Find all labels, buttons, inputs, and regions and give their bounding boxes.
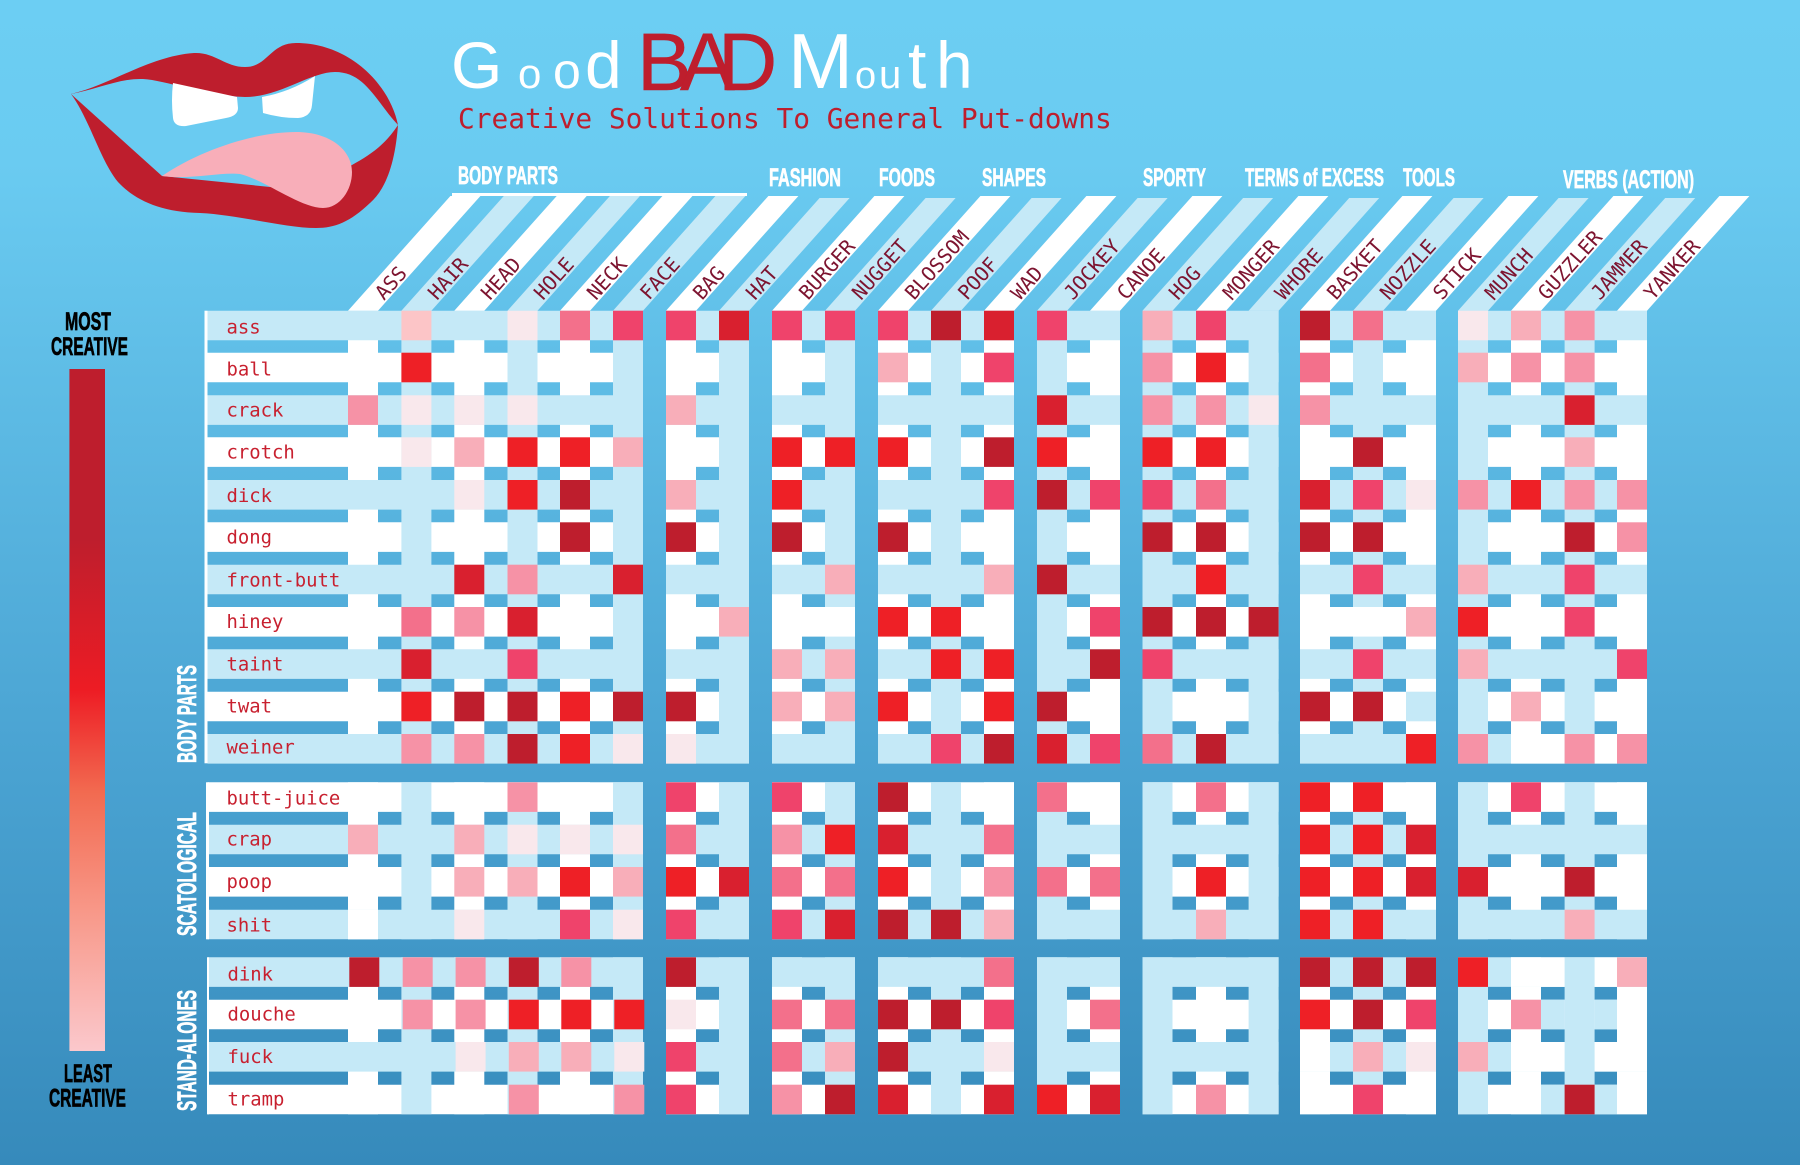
column labels: CANOE [1112, 243, 1170, 304]
header: tools: TOOLS [1403, 164, 1455, 192]
column labels: HOLE [529, 252, 579, 304]
title: o [553, 43, 581, 99]
row: douche [228, 1000, 1617, 1029]
column labels: ASS [370, 261, 412, 304]
row: crack: crack [226, 399, 284, 421]
header: sporty: SPORTY [1143, 164, 1206, 192]
row: crap [226, 825, 1436, 854]
title: M [788, 17, 853, 105]
row: weiner: weiner [226, 736, 295, 758]
column labels: POOF [953, 252, 1003, 304]
column labels: GUZZLER [1533, 225, 1608, 304]
title: u [879, 53, 901, 97]
title: o [518, 50, 541, 97]
column labels: BURGER [794, 234, 861, 304]
column labels: STICK [1428, 243, 1486, 304]
row: tramp: tramp [228, 1089, 284, 1111]
column labels: FACE [635, 252, 685, 304]
column labels: YANKER [1639, 234, 1706, 304]
row: dong: dong [226, 526, 272, 548]
column labels: BLOSSOM [900, 225, 974, 304]
row: butt-juice: butt-juice [226, 787, 340, 809]
title [451, 17, 973, 108]
row: front-butt [226, 565, 1595, 594]
row: ass [226, 311, 1595, 340]
row: fuck [228, 1042, 1647, 1072]
matrix section: stand-alones [207, 957, 1647, 1114]
row: shit: shit [226, 915, 272, 937]
row: ass: ass [226, 317, 261, 339]
column labels: HEAD [476, 252, 526, 304]
column labels: HAIR [423, 252, 473, 304]
title: d [585, 28, 622, 102]
row: crap: crap [226, 829, 272, 851]
matrix section: scatological [206, 782, 1647, 939]
row: poop [226, 867, 1595, 897]
row: dink [228, 957, 1647, 987]
title: t [908, 28, 926, 102]
header: terms of excess: TERMS of EXCESS [1245, 164, 1384, 192]
row: crack [226, 395, 1595, 425]
column labels: BAG [688, 261, 730, 304]
title: G [451, 28, 502, 102]
row: taint: taint [226, 653, 283, 675]
legend label: least creative: CREATIVE [49, 1084, 126, 1112]
row: tramp [228, 1085, 1617, 1114]
legend label: most creative [51, 308, 128, 361]
title: D [718, 17, 777, 108]
row: shit [226, 910, 1595, 939]
column labels: NUGGET [847, 234, 913, 304]
title: o [855, 55, 876, 97]
header: verbs (action): VERBS (ACTION) [1563, 166, 1694, 194]
row: taint [226, 649, 1647, 679]
row: dick: dick [226, 485, 273, 507]
column labels: MONGER [1218, 234, 1285, 304]
column labels: HOG [1164, 261, 1206, 304]
row: crotch: crotch [226, 441, 295, 463]
section label: scatological: SCATOLOGICAL [172, 812, 202, 936]
column labels: MUNCH [1480, 243, 1538, 304]
row: dong [226, 522, 1647, 552]
row: poop: poop [226, 871, 272, 893]
column labels: WHORE [1270, 243, 1328, 304]
column labels: NOZZLE [1375, 234, 1441, 304]
row: weiner [226, 734, 1647, 764]
header: shapes: SHAPES [982, 164, 1046, 192]
column labels: JOCKEY [1059, 234, 1125, 304]
row: butt-juice [226, 782, 1541, 812]
header: body parts: BODY PARTS [458, 162, 558, 190]
row: front-butt: front-butt [226, 570, 340, 592]
row: dick [226, 480, 1647, 510]
row: crotch [226, 437, 1595, 467]
section label: stand-alones: STAND-ALONES [172, 990, 202, 1111]
title: A [680, 17, 735, 108]
header: fashion: FASHION [769, 164, 841, 192]
section label: body parts: BODY PARTS [172, 665, 202, 763]
row: douche: douche [228, 1004, 296, 1026]
title: B [637, 17, 692, 108]
row: twat [226, 692, 1541, 721]
category headers [458, 162, 1694, 194]
legend: creativity scale [49, 308, 128, 1112]
diagonal column header stripes [348, 193, 1749, 311]
row: hiney: hiney [226, 611, 283, 633]
legend label: most creative: MOST [65, 308, 111, 336]
row: fuck: fuck [228, 1046, 274, 1068]
legend label: least creative: LEAST [64, 1060, 112, 1088]
subtitle: Creative Solutions To General Put-downs [458, 102, 1112, 135]
column labels: JAMMER [1586, 234, 1653, 304]
legend label: least creative [49, 1060, 126, 1112]
title: h [936, 28, 973, 102]
matrix section: body parts [204, 311, 1647, 764]
row: dink: dink [228, 963, 274, 985]
column labels: NECK [582, 252, 632, 304]
column labels: BASKET [1322, 234, 1388, 304]
column labels [370, 225, 1706, 304]
column labels: HAT [741, 261, 783, 304]
header: foods: FOODS [879, 164, 935, 192]
column labels: WAD [1006, 261, 1048, 304]
row: hiney [226, 607, 1595, 637]
row: ball [226, 353, 1595, 382]
row: twat: twat [226, 696, 272, 718]
icon: mouth with teeth and tongue [71, 43, 398, 228]
legend gradient bar [69, 369, 105, 1051]
row: ball: ball [226, 359, 272, 381]
legend label: most creative: CREATIVE [51, 333, 128, 361]
